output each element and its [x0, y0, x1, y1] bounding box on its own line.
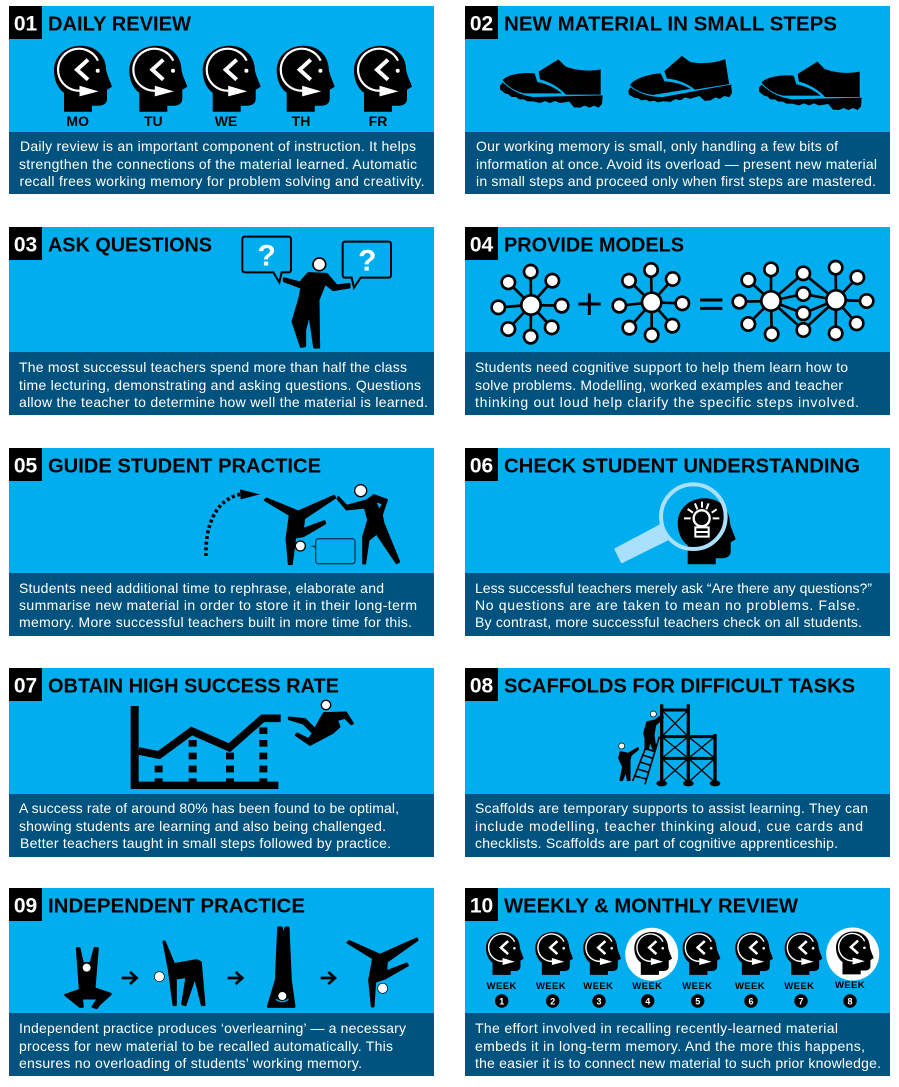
icon: eight weekly heads with highlighted reviews: 6	[748, 996, 754, 1006]
icon: eight weekly heads with highlighted reviews: WEEK	[632, 981, 662, 992]
body text 06: By contrast, more successful teachers check on all students.	[475, 614, 862, 630]
number badge 10	[465, 888, 498, 921]
number badge 01: 01	[14, 12, 37, 36]
body text 01	[19, 138, 424, 189]
number badge 06	[465, 448, 498, 481]
body text 05: memory. More successful teachers built in more time for this.	[19, 614, 412, 630]
number badge 02	[465, 6, 498, 39]
number badge 01	[9, 6, 42, 39]
heading: scaffolds: SCAFFOLDS FOR DIFFICULT TASKS	[504, 674, 855, 698]
heading: guide student practice: GUIDE STUDENT PRACTICE	[48, 454, 321, 478]
icon: eight weekly heads with highlighted reviews: WEEK	[487, 981, 517, 992]
heading: ask questions: ASK QUESTIONS	[48, 234, 212, 256]
body text 07	[19, 800, 399, 851]
number badge 07	[9, 668, 42, 701]
icon: five heads with weekdays: TH	[292, 113, 310, 129]
body text 06	[475, 580, 872, 630]
number badge 03	[9, 227, 42, 260]
diagram: networks adding together	[492, 261, 873, 343]
body text 02: in small steps and proceed only when first steps are mastered.	[476, 173, 876, 189]
number badge 05: 05	[14, 454, 37, 478]
number badge 09	[9, 888, 42, 921]
body text 09	[19, 1020, 406, 1071]
body text 05: Students need additional time to rephrase, elaborate and	[19, 580, 384, 596]
body text 02	[476, 138, 877, 189]
body text 10	[475, 1020, 881, 1071]
body text 07: Better teachers taught in small steps followed by practice.	[20, 835, 391, 851]
icon: teacher with question bubbles: ?	[257, 240, 276, 273]
icon: eight weekly heads with highlighted reviews: WEEK	[583, 981, 613, 992]
body text 01: recall frees working memory for problem solving and creativity.	[20, 173, 424, 189]
number badge 09: 09	[14, 894, 37, 918]
number badge 06: 06	[470, 454, 493, 478]
body text 08: checklists. Scaffolds are part of cognitive apprenticeship.	[475, 835, 838, 851]
body text 06: Less successful teachers merely ask “Are there any questions?”	[475, 580, 872, 596]
icon: five heads with weekdays: TU	[144, 113, 163, 129]
icon: five heads with weekdays: FR	[369, 113, 387, 129]
number badge 07: 07	[14, 674, 37, 698]
body text 03	[19, 359, 428, 410]
panel: 03 ask questions	[9, 227, 434, 415]
icon: eight weekly heads with highlighted reviews: 8	[847, 996, 853, 1006]
icon: teacher with question bubbles	[242, 237, 391, 347]
panel: 09 independent practice	[9, 888, 434, 1076]
body text 09: Independent practice produces ‘overlearning’ — a necessary	[19, 1020, 406, 1036]
body text 04: Students need cognitive support to help them learn how to	[475, 359, 848, 375]
number badge 04: 04	[470, 234, 493, 256]
icon: three shoes stepping	[500, 49, 862, 113]
icon: five heads with weekdays	[54, 46, 412, 129]
panel: 06 check student understanding	[465, 448, 890, 636]
body text 05: summarise new material in order to store it in their long-term	[19, 597, 417, 613]
body text 05	[19, 580, 417, 630]
heading: provide models: PROVIDE MODELS	[504, 234, 684, 256]
icon: eight weekly heads with highlighted reviews: 1	[499, 996, 504, 1006]
heading: new material: NEW MATERIAL IN SMALL STEPS	[504, 12, 837, 36]
body text 04: thinking out loud help clarify the specific steps involved.	[475, 394, 859, 410]
body text 02: information at once. Avoid its overload — present new material	[476, 156, 877, 172]
panel: 02 new material in small steps	[465, 6, 890, 194]
body text 09: process for new material to be recalled automatically. This	[19, 1038, 393, 1054]
icon: eight weekly heads with highlighted reviews: 3	[596, 996, 602, 1006]
chart: rising success line with jumping figure	[131, 700, 353, 789]
heading: daily review: DAILY REVIEW	[48, 12, 192, 36]
number badge 08	[465, 668, 498, 701]
body text 04	[475, 359, 859, 410]
panel: 07 obtain high success rate	[9, 668, 434, 857]
body text 07: showing students are learning and also being challenged.	[19, 818, 386, 834]
body text 09: ensures no overloading of students’ working memory.	[19, 1055, 362, 1071]
icon: eight weekly heads with highlighted reviews: 2	[550, 996, 555, 1006]
number badge 03: 03	[14, 234, 37, 256]
icon: eight weekly heads with highlighted reviews: WEEK	[735, 981, 765, 992]
panel: 10 weekly and monthly review	[465, 888, 890, 1076]
number badge 04	[465, 227, 498, 260]
heading: weekly and monthly review: WEEKLY & MONTHLY REVIEW	[504, 894, 799, 918]
icon: eight weekly heads with highlighted reviews: WEEK	[536, 981, 566, 992]
panel: 08 scaffolds for difficult tasks	[465, 668, 890, 857]
heading: check student understanding: CHECK STUDENT UNDERSTANDING	[504, 454, 860, 478]
icon: magnifier over head with lightbulb	[615, 484, 736, 564]
body text 10: The effort involved in recalling recently-learned material	[475, 1020, 838, 1036]
icon: scaffold with ladder and two figures	[619, 704, 720, 786]
body text 03: The most successul teachers spend more than half the class	[19, 359, 407, 375]
icon: eight weekly heads with highlighted reviews	[486, 928, 879, 1008]
icon: teacher with question bubbles: ?	[358, 245, 376, 278]
icon: eight weekly heads with highlighted reviews: WEEK	[784, 981, 814, 992]
body text 10: the easier it is to connect new material to such prior knowledge.	[475, 1055, 881, 1071]
icon: handstand sequence with arrows	[65, 928, 417, 1008]
icon: five heads with weekdays: WE	[215, 113, 237, 129]
heading: obtain high success rate: OBTAIN HIGH SUCCESS RATE	[48, 674, 339, 698]
body text 07: A success rate of around 80% has been found to be optimal,	[19, 800, 399, 816]
body text 01: Daily review is an important component of instruction. It helps	[20, 138, 416, 154]
icon: eight weekly heads with highlighted reviews: WEEK	[682, 981, 712, 992]
body text 08: Scaffolds are temporary supports to assist learning. They can	[475, 800, 868, 816]
body text 04: solve problems. Modelling, worked examples and teacher	[475, 377, 843, 393]
body text 01: strengthen the connections of the material learned. Automatic	[19, 156, 417, 172]
icon: eight weekly heads with highlighted reviews: 4	[645, 996, 650, 1006]
panel: 05 guide student practice	[9, 448, 434, 636]
icon: teacher guiding cartwheeling student	[206, 485, 399, 564]
number badge 08: 08	[470, 674, 493, 698]
body text 03: time lecturing, demonstrating and asking questions. Questions	[19, 377, 421, 393]
body text 02: Our working memory is small, only handling a few bits of	[476, 138, 838, 154]
body text 06: No questions are are taken to mean no problems. False.	[475, 597, 860, 613]
number badge 05	[9, 448, 42, 481]
number badge 02: 02	[470, 12, 493, 36]
body text 08	[475, 800, 868, 851]
panel: 01 daily review	[9, 6, 434, 194]
panel: 04 provide models	[465, 227, 890, 415]
number badge 10: 10	[470, 894, 493, 918]
icon: eight weekly heads with highlighted reviews: 5	[695, 996, 700, 1006]
heading: independent practice: INDEPENDENT PRACTICE	[48, 894, 305, 918]
body text 08: include modelling, teacher thinking aloud, cue cards and	[475, 818, 863, 834]
body text 10: embeds it in long-term memory. And the more this happens,	[475, 1038, 865, 1054]
icon: eight weekly heads with highlighted reviews: WEEK	[835, 980, 865, 991]
body text 03: allow the teacher to determine how well the material is learned.	[19, 394, 428, 410]
icon: five heads with weekdays: MO	[66, 113, 89, 129]
icon: eight weekly heads with highlighted reviews: 7	[798, 996, 804, 1006]
